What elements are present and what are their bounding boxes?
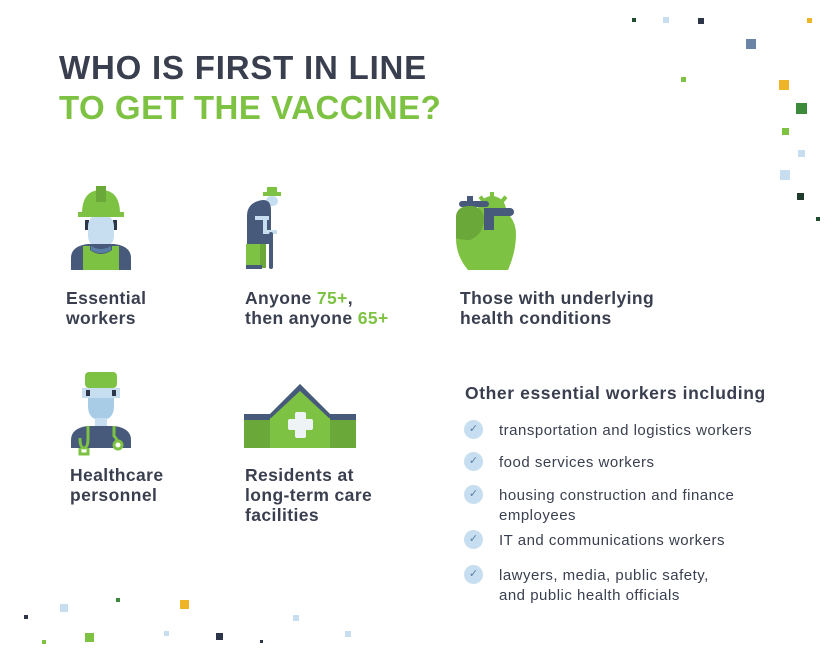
- label: anyone 75+: Anyone 75+,: [245, 288, 353, 308]
- icon: heart: [456, 192, 516, 270]
- item 2: food services workers: [499, 454, 655, 471]
- label: healthcare personnel: Healthcare: [70, 465, 164, 485]
- label: residents: Residents at: [245, 465, 354, 485]
- item 5: ✓: [469, 568, 478, 580]
- item 3: ✓: [469, 488, 478, 500]
- item 5: lawyers, media, public safety,: [499, 567, 709, 584]
- item 3: employees: [499, 507, 576, 524]
- item 5: [464, 565, 709, 604]
- label: healthcare personnel: personnel: [70, 485, 157, 505]
- item 1: transportation and logistics workers: [499, 422, 752, 439]
- label: residents: [245, 465, 372, 525]
- label: residents: long-term care: [245, 485, 372, 505]
- label: underlying conditions: health conditions: [460, 308, 612, 328]
- label: essential workers: [66, 288, 146, 328]
- item 4: ✓: [469, 533, 478, 545]
- label: healthcare personnel: [70, 465, 164, 505]
- label: anyone 75+: then anyone 65+: [245, 308, 389, 328]
- item 3: [464, 485, 734, 524]
- icon: construction worker: [71, 186, 131, 270]
- title: WHO IS FIRST IN LINE: [59, 49, 427, 86]
- item 1: ✓: [469, 423, 478, 435]
- title: [59, 49, 441, 126]
- item 4: IT and communications workers: [499, 532, 725, 549]
- list heading: Other essential workers including: [465, 383, 766, 403]
- item 3: housing construction and finance: [499, 487, 734, 504]
- item 2: ✓: [469, 455, 478, 467]
- item 5: and public health officials: [499, 587, 680, 604]
- list: other essential workers: [464, 420, 752, 604]
- label: residents: facilities: [245, 505, 319, 525]
- label: underlying conditions: Those with underlying: [460, 288, 654, 308]
- icon: healthcare worker: [71, 372, 131, 456]
- icon: elderly person: [246, 187, 281, 269]
- icon: care facility: [244, 384, 356, 448]
- label: essential workers: Essential: [66, 288, 146, 308]
- label: essential workers: workers: [66, 308, 136, 328]
- title: TO GET THE VACCINE?: [59, 89, 441, 126]
- label: underlying conditions: [460, 288, 654, 328]
- label: anyone 75+: [245, 288, 389, 328]
